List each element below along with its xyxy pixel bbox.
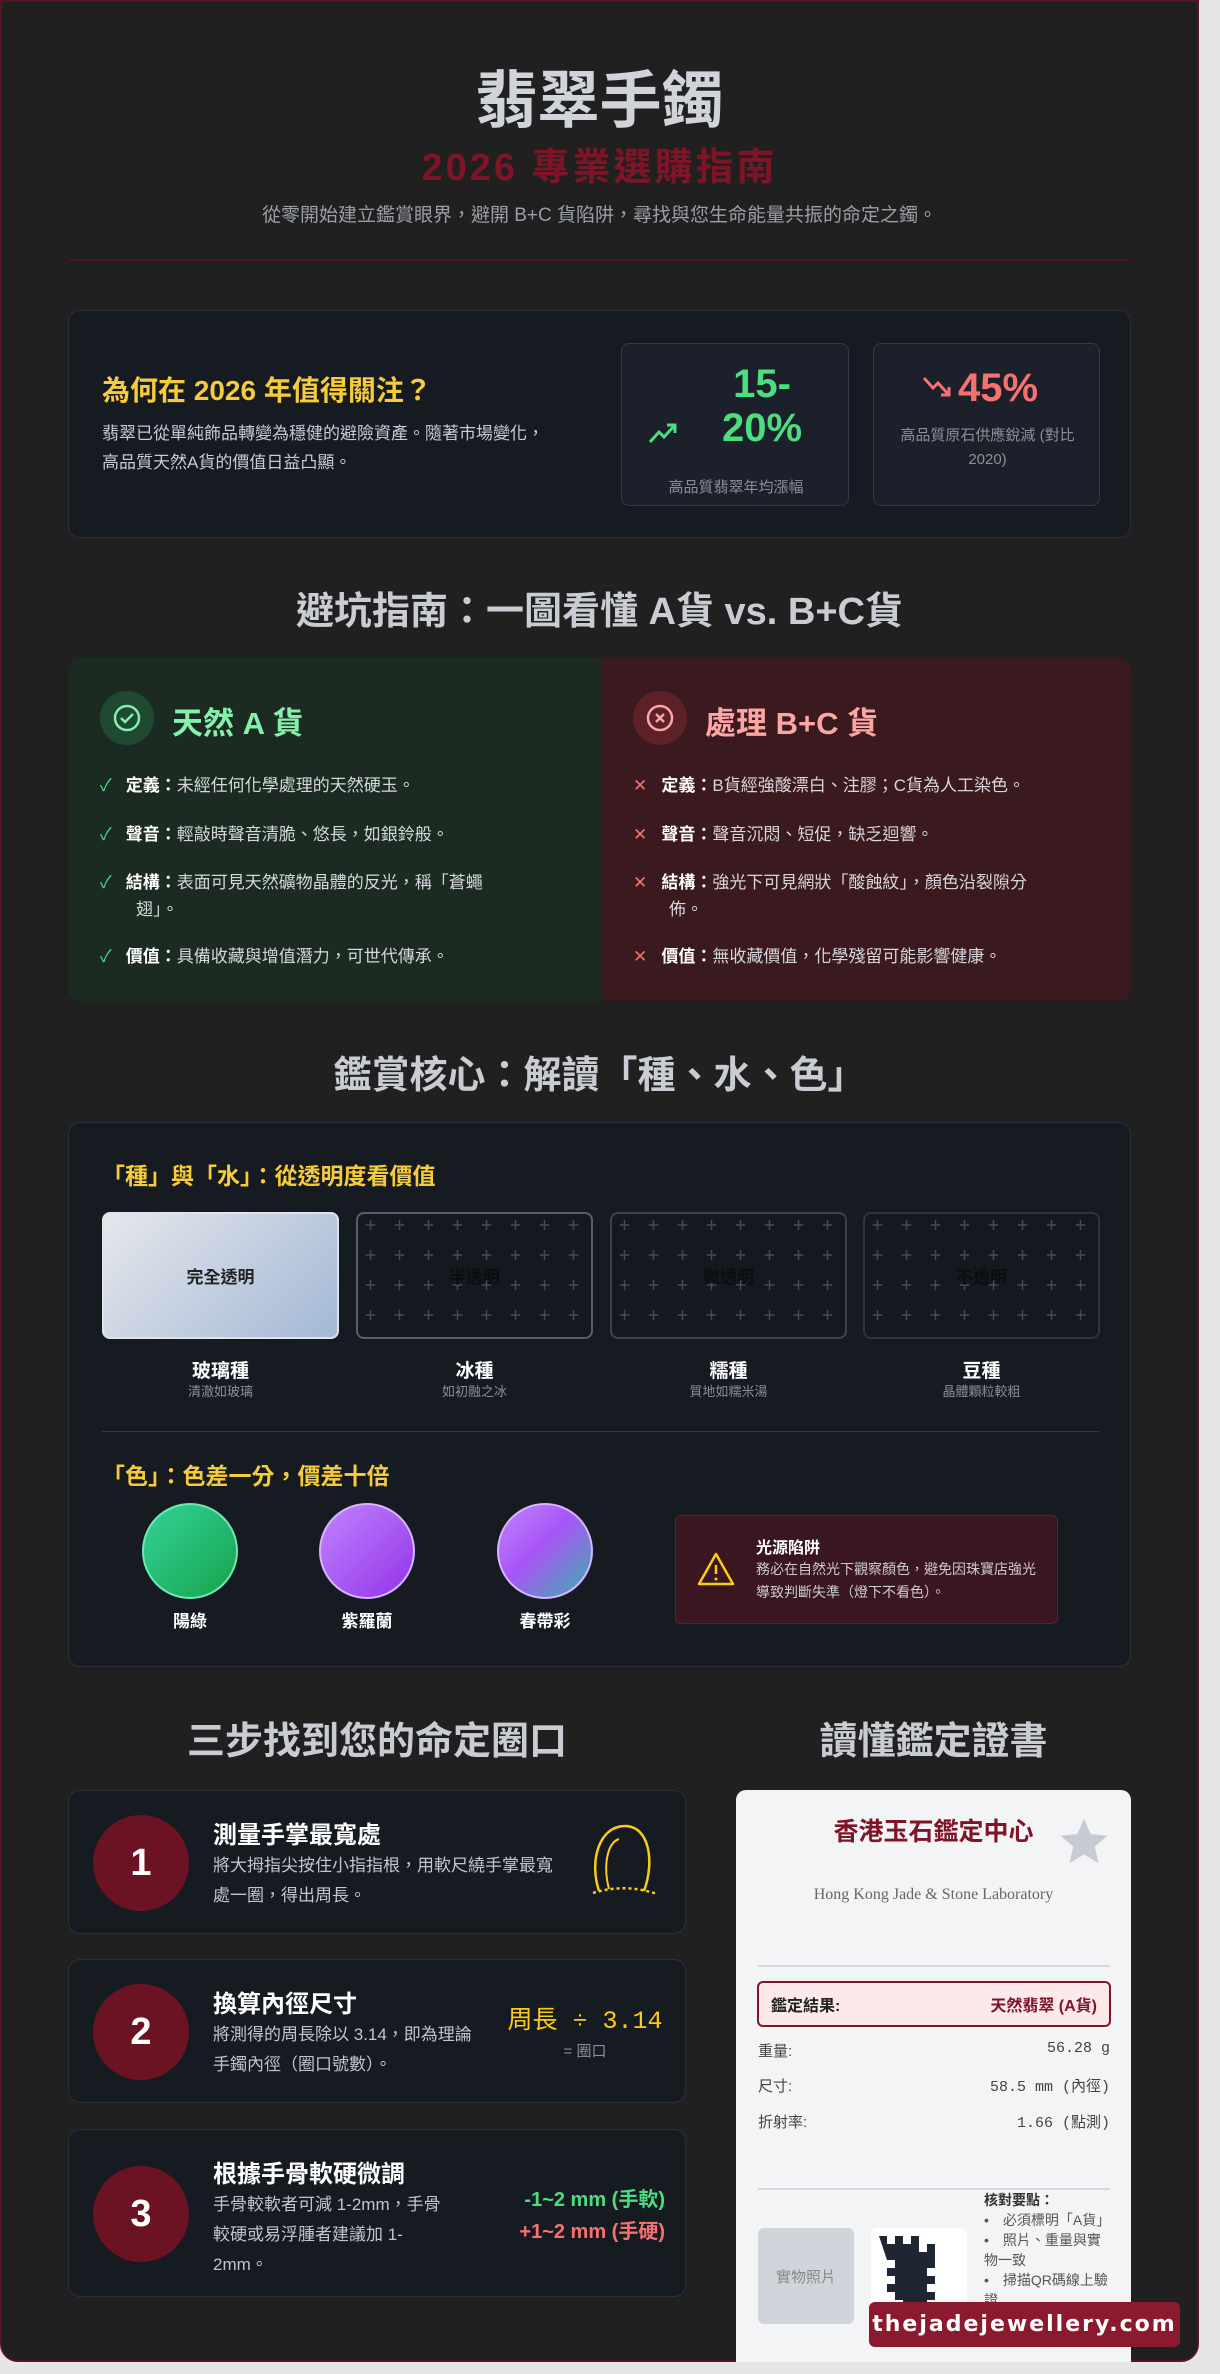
checklist: • 必須標明「A貨」	[984, 2212, 1110, 2228]
transparency boxes: 冰種	[455, 1361, 494, 1382]
transparency boxes: 完全透明	[186, 1268, 254, 1287]
adjustments	[519, 2188, 665, 2243]
transparency boxes: 玻璃種	[192, 1361, 249, 1382]
callout: light trap	[675, 1515, 1058, 1624]
step 2: 將測得的周長除以 3.14，即為理論手鐲內徑（圈口號數）。	[213, 2025, 472, 2074]
title: 翡翠手鐲	[475, 67, 724, 136]
transparency boxes: 清澈如玻璃	[188, 1384, 253, 1399]
list: B+C grade: ✕ 定義：B貨經強酸漂白、注膠；C貨為人工染色。	[633, 776, 1025, 795]
heading: three steps: 三步找到您的命定圈口	[187, 1721, 567, 1763]
stat: 15-20%: 15-	[733, 362, 791, 406]
result box: 鑑定結果:	[771, 1998, 840, 2015]
certificate card: 折射率:	[758, 2114, 807, 2131]
intro text: 從零開始建立鑑賞眼界，避開 B+C 貨陷阱，尋找與您生命能量共振的命定之鐲。	[262, 205, 937, 226]
certificate card: 重量:	[758, 2043, 792, 2060]
icon: star	[1060, 1819, 1108, 1863]
step 2: 換算內徑尺寸	[213, 1991, 357, 2018]
transparency boxes: 微透明	[703, 1268, 754, 1287]
photo placeholder: 實物照片	[776, 2268, 836, 2286]
panel: A grade: 天然 A 貨	[172, 706, 303, 741]
certificate card: 1.66 (點測)	[1017, 2115, 1110, 2132]
list: B+C grade: ✕ 價值：無收藏價值，化學殘留可能影響健康。	[633, 947, 1001, 966]
list: A grade	[100, 776, 483, 966]
colour circles: 紫羅蘭	[342, 1612, 392, 1631]
heading: appreciation: 鑑賞核心：解讀「種、水、色」	[333, 1055, 866, 1097]
subheading: colour: 「色」：色差一分，價差十倍	[102, 1463, 390, 1489]
transparency boxes: 不透明	[956, 1268, 1007, 1287]
step 3: 手骨較軟者可減 1-2mm，手骨較硬或易浮腫者建議加 1-2mm。	[213, 2195, 441, 2274]
icon: warning	[698, 1552, 734, 1586]
step 1: 將大拇指尖按住小指指根，用軟尺繞手掌最寬處一圈，得出周長。	[213, 1856, 553, 1905]
stat: 45%: 45%	[958, 366, 1038, 410]
colour circles	[142, 1503, 593, 1631]
panel: A grade	[68, 658, 601, 1001]
cert title: 香港玉石鑑定中心	[833, 1818, 1034, 1846]
transparency boxes	[102, 1212, 1100, 1399]
result box	[757, 1981, 1111, 2027]
checklist: • 照片、重量與實物一致	[984, 2232, 1101, 2268]
footer badge	[869, 2302, 1180, 2347]
panel: appreciation	[68, 1122, 1131, 1667]
list: A grade: ✓ 聲音：輕敲時聲音清脆、悠長，如銀鈴般。	[100, 825, 449, 844]
text: why: 高品質天然A貨的價值日益凸顯。	[102, 453, 351, 472]
step 3: 3	[130, 2192, 152, 2234]
list: A grade: ✓ 價值：具備收藏與增值潛力，可世代傳承。	[100, 947, 449, 966]
step 2: 2	[130, 2010, 152, 2052]
step 2	[68, 1959, 686, 2103]
certificate card: 58.5 mm (內徑)	[990, 2079, 1110, 2096]
certificate card: 尺寸:	[758, 2078, 792, 2095]
icon: trend up	[649, 424, 676, 443]
callout: light trap: 光源陷阱	[756, 1540, 820, 1557]
transparency boxes: 質地如糯米湯	[689, 1384, 768, 1399]
transparency boxes: 如初融之冰	[442, 1384, 507, 1399]
cert english name: Hong Kong Jade & Stone Laboratory	[814, 1886, 1053, 1903]
icon: x circle	[633, 691, 687, 745]
icon: hand loop	[592, 1824, 656, 1894]
list: B+C grade: ✕ 聲音：聲音沉悶、短促，缺乏迴響。	[633, 825, 933, 844]
text: why: 翡翠已從單純飾品轉變為穩健的避險資產。隨著市場變化，	[102, 424, 544, 443]
stat: 45%: 高品質原石供應銳減 (對比2020)	[900, 427, 1075, 468]
adjustments: +1~2 mm (手硬)	[519, 2221, 665, 2243]
colour circles: 陽綠	[173, 1612, 207, 1631]
certificate card: 56.28 g	[1047, 2040, 1110, 2057]
result box: 天然翡翠 (A貨)	[990, 1998, 1097, 2015]
step 3	[68, 2129, 686, 2297]
list: B+C grade	[633, 776, 1027, 966]
transparency boxes: 晶體顆粒較粗	[942, 1384, 1020, 1399]
colour circles: 春帶彩	[520, 1612, 570, 1631]
panel: comparison	[68, 658, 1131, 1001]
checklist: 核對要點：	[984, 2192, 1054, 2208]
icon: trend down	[923, 377, 950, 396]
subtitle: 2026 專業選購指南	[421, 147, 778, 189]
checklist	[984, 2192, 1110, 2308]
list: A grade: ✓ 結構：表面可見天然礦物晶體的反光，稱「蒼蠅翅」。	[100, 873, 483, 919]
qr code	[871, 2228, 967, 2324]
panel: B+C grade: 處理 B+C 貨	[705, 706, 878, 741]
panel: B+C grade	[601, 658, 1131, 1001]
step 1: 1	[130, 1842, 152, 1884]
formula: = 圈口	[564, 2043, 606, 2060]
heading: avoid pitfalls: 避坑指南：一圖看懂 A貨 vs. B+C貨	[296, 591, 903, 633]
text: why	[102, 424, 544, 472]
step 3: 根據手骨軟硬微調	[213, 2161, 405, 2188]
formula	[507, 2007, 663, 2060]
stat: 15-20%	[621, 343, 849, 506]
stat: 45%	[873, 343, 1100, 506]
transparency boxes: 半透明	[449, 1268, 500, 1287]
footer badge: thejadejewellery.com	[872, 2312, 1177, 2337]
subheading: transparency: 「種」與「水」：從透明度看價值	[102, 1163, 436, 1189]
callout: light trap: 務必在自然光下觀察顏色，避免因珠寶店強光導致判斷失準（燈下不看色）。	[756, 1561, 1036, 1600]
heading: certificate: 讀懂鑑定證書	[819, 1721, 1048, 1763]
stat: 15-20%: 高品質翡翠年均漲幅	[668, 479, 804, 496]
certificate card	[736, 1790, 1131, 2362]
list: A grade: ✓ 定義：未經任何化學處理的天然硬玉。	[100, 776, 415, 795]
icon: check circle	[100, 691, 154, 745]
heading: why: 為何在 2026 年值得關注？	[102, 375, 432, 406]
step 1: 測量手掌最寬處	[213, 1822, 381, 1849]
stat: 15-20%: 20%	[722, 406, 802, 450]
step 1	[68, 1790, 686, 1934]
panel: why 2026	[68, 310, 1131, 538]
transparency boxes: 豆種	[962, 1361, 1000, 1382]
photo placeholder	[758, 2228, 854, 2324]
transparency boxes: 糯種	[709, 1361, 748, 1382]
list: B+C grade: ✕ 結構：強光下可見網狀「酸蝕紋」，顏色沿裂隙分佈。	[633, 873, 1027, 919]
adjustments: -1~2 mm (手軟)	[524, 2189, 665, 2211]
formula: 周長 ÷ 3.14	[507, 2007, 663, 2036]
checklist: • 掃描QR碼線上驗證	[984, 2272, 1108, 2308]
